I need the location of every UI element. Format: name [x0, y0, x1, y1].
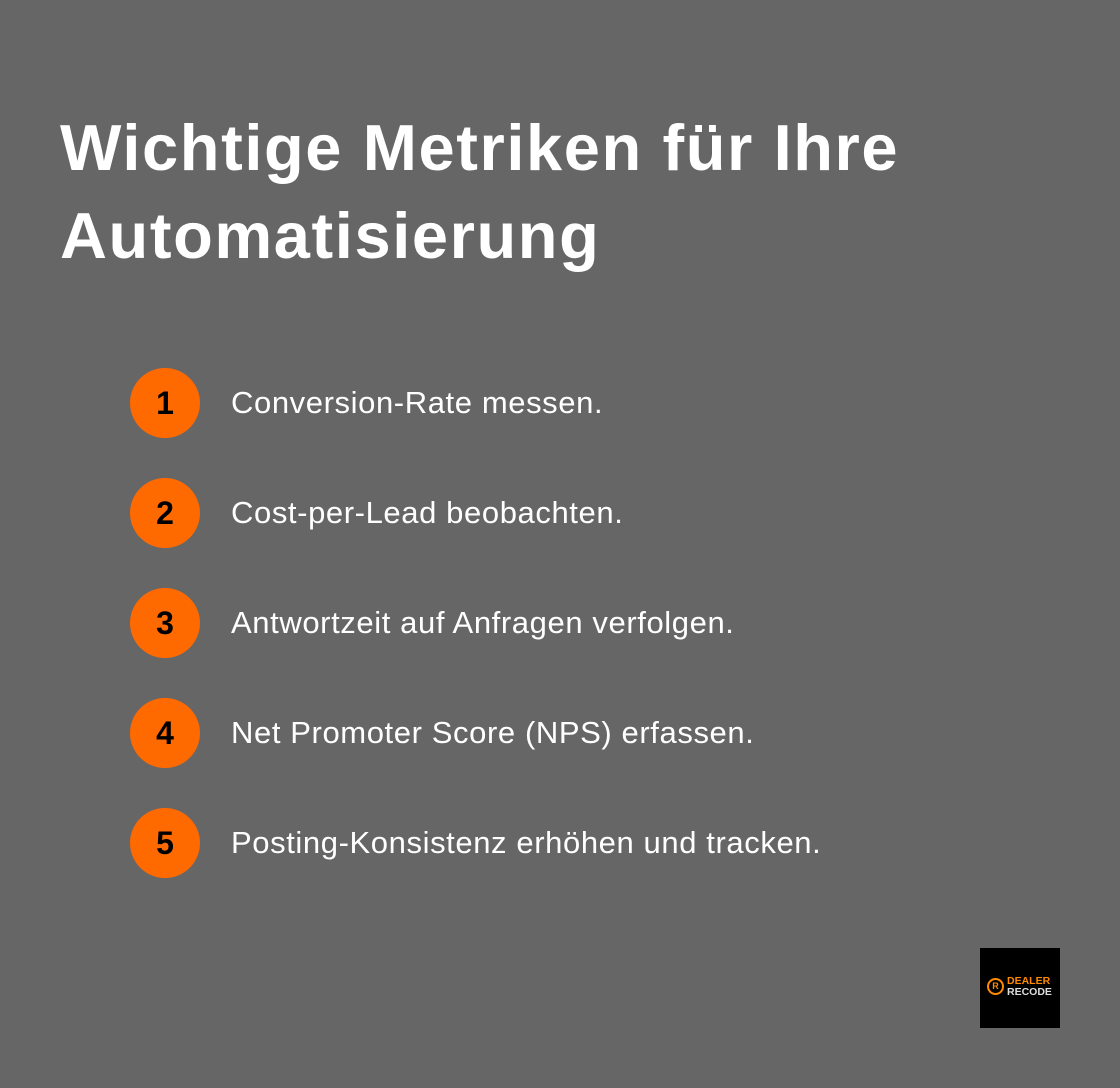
item 2: Cost-per-Lead beobachten. [231, 495, 623, 530]
logo: RECODE [1007, 986, 1052, 998]
item 2 [130, 478, 623, 548]
item 1: Conversion-Rate messen. [231, 385, 603, 420]
item 4 [130, 698, 754, 768]
item 5: Posting-Konsistenz erhöhen und tracken. [231, 825, 821, 860]
item 3 [130, 588, 735, 658]
logo: R [992, 981, 999, 991]
title: Wichtige Metriken für Ihre [60, 111, 899, 184]
item 5 [130, 808, 821, 878]
item 2: 2 [156, 495, 174, 531]
item 1 [130, 368, 603, 438]
title: Automatisierung [60, 199, 600, 272]
item 3: 3 [156, 605, 174, 641]
item 1: 1 [156, 385, 174, 421]
title [60, 111, 899, 272]
item 5: 5 [156, 825, 174, 861]
item 4: 4 [156, 715, 174, 751]
logo: DEALER [1007, 975, 1050, 987]
item 4: Net Promoter Score (NPS) erfassen. [231, 715, 754, 750]
item 3: Antwortzeit auf Anfragen verfolgen. [231, 605, 735, 640]
logo [980, 948, 1060, 1028]
